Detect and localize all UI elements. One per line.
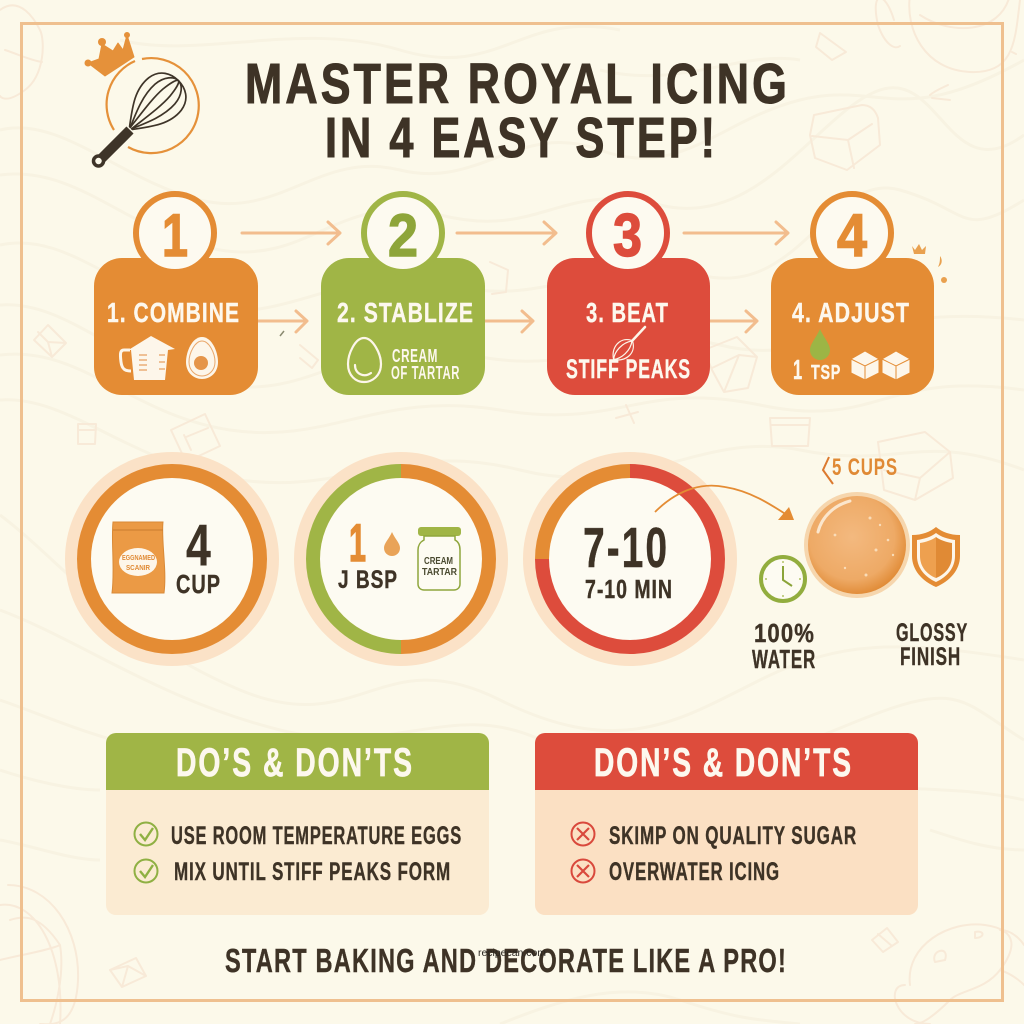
icon: sugar bag: EGGNAMED xyxy=(122,553,155,562)
icon: measuring cup xyxy=(120,336,175,380)
icon: chevron and 5 cups label xyxy=(823,454,898,484)
panel: do's: DO’S & DON’TS xyxy=(176,741,414,785)
step 3: beat: STIFF PEAKS xyxy=(566,354,691,384)
label: 100% water: 100% xyxy=(754,618,815,648)
whisk xyxy=(94,64,195,166)
gauge: sugar 4 cup xyxy=(65,452,279,666)
one teaspoon label: TSP xyxy=(811,362,841,384)
icon: check xyxy=(134,822,158,846)
whisk ring xyxy=(107,58,199,153)
one teaspoon label xyxy=(793,354,841,385)
icon: shield xyxy=(912,527,960,587)
cream of tartar label: CREAM xyxy=(392,346,438,366)
label: glossy finish: GLOSSY xyxy=(896,619,968,647)
label: 100% water: WATER xyxy=(752,644,816,674)
icon: orange drop xyxy=(384,532,400,556)
icon: halved egg xyxy=(186,337,218,379)
step 4: adjust xyxy=(771,194,934,395)
panel: don'ts xyxy=(535,733,918,915)
gauge: cream of tartar 1 tbsp: J BSP xyxy=(338,566,398,594)
step 3: beat xyxy=(547,194,710,395)
icon: cream of tartar jar xyxy=(418,527,461,590)
icon: sugar bag: SCANIR xyxy=(126,563,150,572)
step 3: beat: 3 xyxy=(613,202,642,269)
panel: do's: MIX UNTIL STIFF PEAKS FORM xyxy=(174,858,451,886)
step 2: stabilize: 2 xyxy=(388,202,418,269)
panel: do's: USE ROOM TEMPERATURE EGGS xyxy=(171,822,462,850)
icon: cream of tartar jar: CREAM xyxy=(424,556,453,567)
one teaspoon label: 1 xyxy=(793,354,803,385)
icon: green drop xyxy=(810,329,830,360)
label: 100% water xyxy=(752,618,816,674)
icon: clock xyxy=(761,557,805,601)
panel: don'ts: SKIMP ON QUALITY SUGAR xyxy=(609,822,857,850)
gauge: sugar 4 cup: 4 xyxy=(186,513,213,578)
step 4: adjust: 4. ADJUST xyxy=(792,297,910,328)
cream of tartar label xyxy=(391,346,460,383)
crown xyxy=(84,32,134,76)
icon: crown and whisk logo xyxy=(84,32,199,166)
step 2: stabilize: 2. STABLIZE xyxy=(337,297,474,328)
label: glossy finish: FINISH xyxy=(900,643,961,671)
label: glossy finish xyxy=(896,619,968,671)
panel: do's xyxy=(106,733,489,915)
curved arrow xyxy=(655,486,794,520)
gauge: cream of tartar 1 tbsp: 1 xyxy=(349,514,366,573)
step 1: combine: 1 xyxy=(162,202,188,269)
icon: egg outline xyxy=(348,338,381,382)
icon: small whisk xyxy=(608,327,645,365)
closing call to action: START BAKING AND DECORATE LIKE A PRO! xyxy=(225,942,787,979)
icon: cross xyxy=(572,860,594,882)
smudge near arrow xyxy=(280,331,284,336)
step 1: combine xyxy=(94,194,258,395)
title: IN 4 EASY STEP! xyxy=(325,106,718,170)
step 4: adjust: 4 xyxy=(837,202,868,269)
icon: sugar bag xyxy=(112,522,165,593)
step 2: stabilize xyxy=(321,194,485,395)
icon: sugar cubes xyxy=(851,351,910,380)
icon: check xyxy=(134,860,158,882)
icon: cross xyxy=(572,822,594,846)
title: MASTER ROYAL ICING xyxy=(245,52,790,116)
step 1: combine: 1. COMBINE xyxy=(107,297,240,328)
gauge: 7-10 minutes: 7-10 MIN xyxy=(585,574,673,604)
arrows between steps xyxy=(242,222,788,332)
step 3: beat: 3. BEAT xyxy=(586,297,669,328)
icon: icing ball xyxy=(804,492,910,598)
gauge: cream of tartar 1 tbsp xyxy=(294,452,508,666)
gauge: 7-10 minutes xyxy=(523,452,737,666)
gauge: 7-10 minutes: 7-10 xyxy=(583,516,669,580)
panel: don'ts: DON’S & DON’TS xyxy=(594,741,853,785)
title xyxy=(245,52,790,170)
watermark: recipecan.com xyxy=(478,948,546,959)
icon: cream of tartar jar: TARTAR xyxy=(422,567,458,578)
gauge: sugar 4 cup: CUP xyxy=(176,569,221,599)
sparkles by step 4 xyxy=(912,244,947,283)
icon: chevron and 5 cups label: 5 CUPS xyxy=(832,454,898,481)
cream of tartar label: OF TARTAR xyxy=(391,363,460,383)
panel: don'ts: OVERWATER ICING xyxy=(609,858,780,886)
